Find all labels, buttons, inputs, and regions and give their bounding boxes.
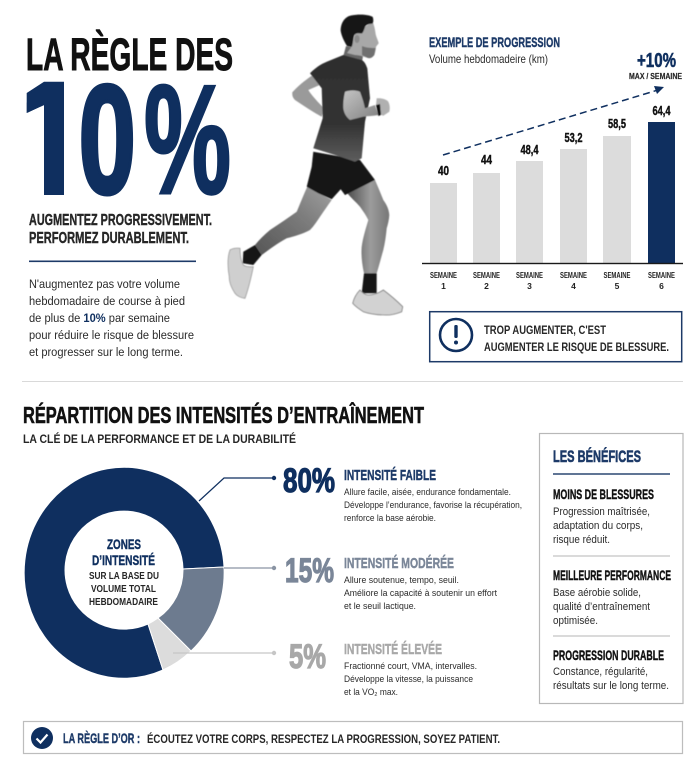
- donut centre text: ZONES: [107, 536, 141, 552]
- headline number: 10%: %: [144, 53, 231, 226]
- heading: exemple de progression: EXEMPLE DE PROGRESSION: [429, 34, 560, 50]
- segment: 80%: [24, 467, 224, 678]
- chart subtitle: Volume hebdomadeire (km): [429, 52, 548, 66]
- axis labels: SEMAINE: [516, 270, 543, 280]
- callout: +10% max par semaine: +10%: [637, 50, 676, 72]
- intro text block: N'augmentez pas votre volume: [29, 277, 180, 291]
- bar week 3: [516, 143, 543, 263]
- bar week 3: 48,4: [520, 143, 539, 157]
- zone: moderate intensity: INTENSITÉ MODÉRÉE: [344, 555, 454, 572]
- axis labels: 4: [571, 281, 576, 291]
- zone: moderate intensity: et le seuil lactique.: [344, 601, 416, 612]
- zone: high intensity: [289, 638, 477, 698]
- footer banner: golden rule: [24, 722, 682, 754]
- footer banner: golden rule: LA RÈGLE D’OR :: [63, 730, 140, 746]
- bar week 4: 53,2: [564, 131, 583, 145]
- torso: [310, 55, 370, 162]
- zone: low intensity: Allure facile, aisée, endurance fondamentale.: [344, 487, 511, 498]
- icon: exclamation: [440, 319, 472, 351]
- donut centre text: [89, 536, 159, 608]
- zone: low intensity: [283, 462, 522, 524]
- zone: moderate intensity: [285, 552, 497, 612]
- donut centre text: D’INTENSITÉ: [92, 552, 155, 568]
- zone: high intensity: INTENSITÉ ÉLEVÉE: [344, 641, 442, 658]
- bar week 5: 58,5: [608, 117, 626, 131]
- zone: high intensity: et la VO₂ max.: [344, 687, 398, 698]
- segment: 5%: [148, 618, 191, 670]
- axis labels: [430, 270, 675, 291]
- bar week 4: [560, 131, 587, 263]
- axis labels: SEMAINE: [473, 270, 500, 280]
- bar chart: weekly volume: [422, 104, 683, 291]
- panel: benefits: [540, 434, 683, 704]
- hair: [341, 15, 373, 47]
- zone: low intensity: Développe l’endurance, favorise la récupération,: [344, 500, 522, 511]
- warning callout: TROP AUGMENTER, C'EST: [484, 323, 607, 337]
- ear: [354, 35, 360, 43]
- bar week 2: 44: [481, 153, 492, 167]
- tagline: PERFORMEZ DURABLEMENT.: [29, 230, 189, 247]
- callout: +10% max par semaine: [629, 50, 682, 81]
- illustration: runner: [228, 15, 403, 315]
- benefit: better performance: optimisée.: [553, 615, 598, 627]
- benefit: better performance: qualité d’entraînement: [553, 601, 650, 613]
- title: la règle des: LA RÈGLE DES: [26, 29, 233, 80]
- axis labels: 6: [659, 281, 664, 291]
- intro text block: hebdomadaire de course à pied: [29, 294, 185, 308]
- footer banner: golden rule: ÉCOUTEZ VOTRE CORPS, RESPECTEZ LA PROGRESSION, SOYEZ PATIENT.: [147, 731, 500, 746]
- axis labels: SEMAINE: [604, 270, 631, 280]
- front shoe: [353, 290, 403, 315]
- intro text block: et progresser sur le long terme.: [29, 345, 183, 359]
- benefit: fewer injuries: adaptation du corps,: [553, 520, 643, 532]
- bar week 6: 64,4: [652, 104, 671, 118]
- axis labels: SEMAINE: [430, 270, 457, 280]
- zone: low intensity: INTENSITÉ FAIBLE: [344, 467, 436, 484]
- zone: moderate intensity: 15%: [285, 552, 334, 590]
- intro text block: pour réduire le risque de blessure: [29, 328, 194, 342]
- zone: high intensity: Développe la vitesse, la puissance: [344, 674, 473, 685]
- segment: 15%: [158, 567, 224, 651]
- leader line: 15%: [224, 566, 276, 570]
- donut centre text: VOLUME TOTAL: [91, 583, 156, 595]
- donut centre text: HEBDOMADAIRE: [89, 596, 158, 608]
- donut centre text: SUR LA BASE DU: [89, 570, 159, 582]
- benefit: durable progression: résultats sur le long terme.: [553, 680, 669, 692]
- benefit: better performance: Base aérobie solide,: [553, 587, 641, 599]
- headline number: 10%: [26, 82, 230, 196]
- bar week 1: [430, 164, 457, 263]
- arrow: progression trend: [443, 86, 664, 155]
- headline number: 10%: 10: [21, 53, 136, 226]
- back sock: [243, 245, 262, 265]
- front arm: [343, 90, 378, 120]
- benefit: durable progression: [553, 647, 669, 692]
- front sock: [362, 273, 377, 293]
- intro text block: [29, 277, 194, 359]
- zone: high intensity: 5%: [289, 638, 326, 676]
- callout: +10% max par semaine: MAX / SEMAINE: [629, 71, 682, 81]
- neck: [343, 46, 364, 62]
- bar week 6: [648, 104, 675, 263]
- axis labels: SEMAINE: [560, 270, 587, 280]
- icon: check mark: [31, 727, 53, 749]
- shorts: [307, 152, 375, 199]
- tagline: AUGMENTEZ PROGRESSIVEMENT.: [29, 212, 212, 229]
- section subtitle: LA CLÉ DE LA PERFORMANCE ET DE LA DURABILITÉ: [23, 431, 296, 446]
- bar week 1: 40: [438, 164, 449, 178]
- bar week 5: [603, 117, 631, 263]
- axis labels: 1: [441, 281, 446, 291]
- benefits heading: LES BÉNÉFICES: [553, 447, 641, 466]
- bar week 2: [473, 153, 500, 263]
- donut chart: intensity zones: [24, 467, 224, 678]
- section heading: RÉPARTITION DES INTENSITÉS D’ENTRAÎNEMENT: [23, 401, 424, 428]
- tagline: [29, 212, 212, 247]
- back leg: [255, 187, 332, 255]
- front leg: [347, 180, 389, 273]
- zone: high intensity: Fractionné court, VMA, intervalles.: [344, 661, 477, 672]
- zone: moderate intensity: Allure soutenue, tempo, seuil.: [344, 575, 459, 586]
- back shoe: [228, 248, 253, 298]
- axis labels: SEMAINE: [648, 270, 675, 280]
- axis labels: 3: [527, 281, 532, 291]
- axis labels: 5: [615, 281, 620, 291]
- zone: low intensity: renforce la base aérobie.: [344, 513, 436, 524]
- leader line: 5%: [173, 651, 276, 655]
- watch: [376, 104, 381, 116]
- head: [347, 22, 379, 58]
- benefit: fewer injuries: [553, 486, 654, 546]
- benefit: better performance: [553, 567, 671, 627]
- back arm: [292, 76, 324, 117]
- leader line: 80%: [199, 476, 276, 501]
- zone: moderate intensity: Améliore la capacité à soutenir un effort: [344, 588, 497, 599]
- axis labels: 2: [484, 281, 489, 291]
- benefit: fewer injuries: Progression maîtrisée,: [553, 506, 650, 518]
- benefit: fewer injuries: risque réduit.: [553, 534, 610, 546]
- intro text block: de plus de 10% par semaine: [29, 311, 170, 325]
- warning callout: [430, 312, 682, 362]
- hand: [376, 98, 390, 116]
- zone: low intensity: 80%: [283, 462, 335, 500]
- benefit: durable progression: Constance, régularité,: [553, 666, 648, 678]
